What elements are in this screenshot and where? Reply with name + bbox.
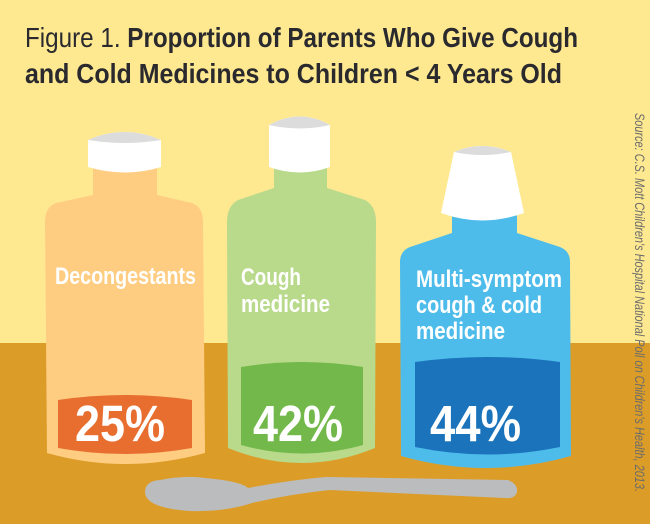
bottle: decongestants: Decongestants [55, 263, 196, 290]
bottle: cough medicine: 42% [253, 395, 343, 452]
label band [415, 357, 560, 454]
bottle: cough medicine [227, 116, 376, 463]
bottle: multi-symptom: 44% [430, 395, 521, 452]
bottle: multi-symptom: medicine [416, 318, 505, 345]
title: Figure 1. Proportion of Parents Who Give Cough [25, 22, 578, 53]
bottle: cough medicine: medicine [241, 291, 330, 318]
title: and Cold Medicines to Children < 4 Years Old [25, 58, 562, 89]
bottle: cough medicine: Cough [241, 264, 301, 291]
bottle: decongestants: 25% [75, 395, 165, 452]
label band [58, 395, 192, 454]
bottle: multi-symptom [400, 146, 571, 468]
icon: spoon [145, 477, 517, 511]
bottle: decongestants [45, 132, 205, 464]
title [25, 22, 578, 89]
bottle: multi-symptom: Multi-symptom [416, 266, 562, 293]
bottle: multi-symptom: cough & cold [416, 292, 542, 319]
label band [241, 362, 363, 454]
